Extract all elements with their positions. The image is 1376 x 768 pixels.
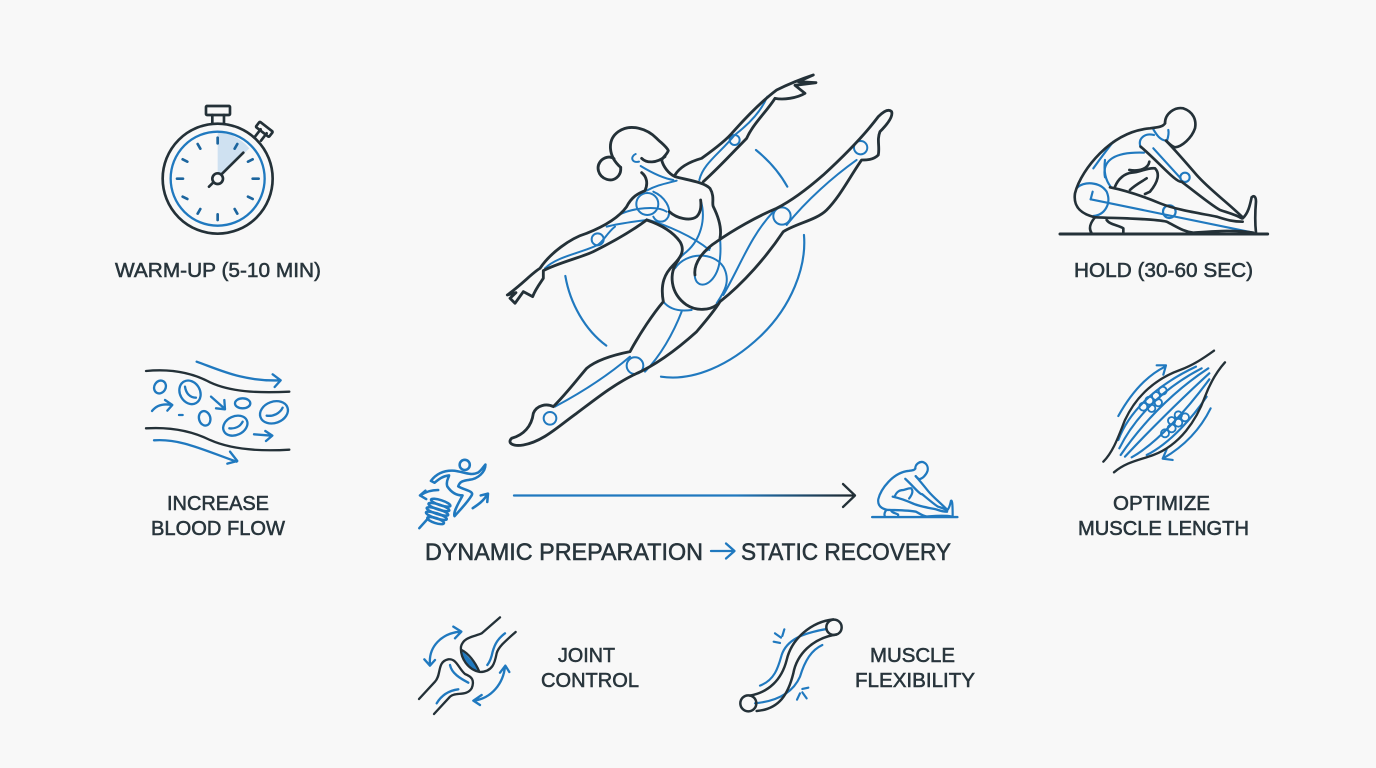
heading: dynamic preparation to static recovery: [425, 539, 951, 566]
icon: stopwatch: [163, 106, 273, 234]
motion arcs: [565, 150, 804, 378]
label: optimize muscle length: [1078, 492, 1249, 540]
label: increase blood flow: [151, 492, 286, 540]
label: increase blood flow: BLOOD FLOW: [151, 517, 286, 540]
illustration: leaping dancer: [507, 75, 892, 445]
heading: dynamic preparation to static recovery: DYNAMIC PREPARATION: [425, 539, 703, 566]
icon: flexible muscle band: [740, 619, 842, 711]
icon: joint: [419, 617, 516, 714]
label: optimize muscle length: MUSCLE LENGTH: [1078, 517, 1249, 540]
label: warm-up: WARM-UP (5-10 MIN): [115, 259, 321, 282]
label: optimize muscle length: OPTIMIZE: [1113, 492, 1210, 515]
label: joint control: [541, 644, 639, 692]
heading: dynamic preparation to static recovery: STATIC RECOVERY: [741, 539, 951, 566]
label: increase blood flow: INCREASE: [167, 492, 269, 515]
icon: dynamic runner with spring: [419, 460, 488, 528]
body outline: [507, 75, 892, 445]
label: joint control: JOINT: [558, 644, 615, 667]
arrow: dynamic to static: [514, 484, 855, 507]
label: joint control: CONTROL: [541, 669, 639, 692]
icon: muscle fibres: [1103, 351, 1225, 472]
label: hold: HOLD (30-60 SEC): [1074, 259, 1253, 282]
icon: static stretch figure: [872, 462, 957, 517]
icon: blood flow vessel: [146, 362, 291, 464]
anatomy lines: [544, 97, 867, 425]
label: muscle flexibility: FLEXIBILITY: [855, 669, 975, 692]
icon: seated stretch figure: [1060, 108, 1268, 234]
label: muscle flexibility: MUSCLE: [870, 644, 955, 667]
label: muscle flexibility: [855, 644, 975, 692]
